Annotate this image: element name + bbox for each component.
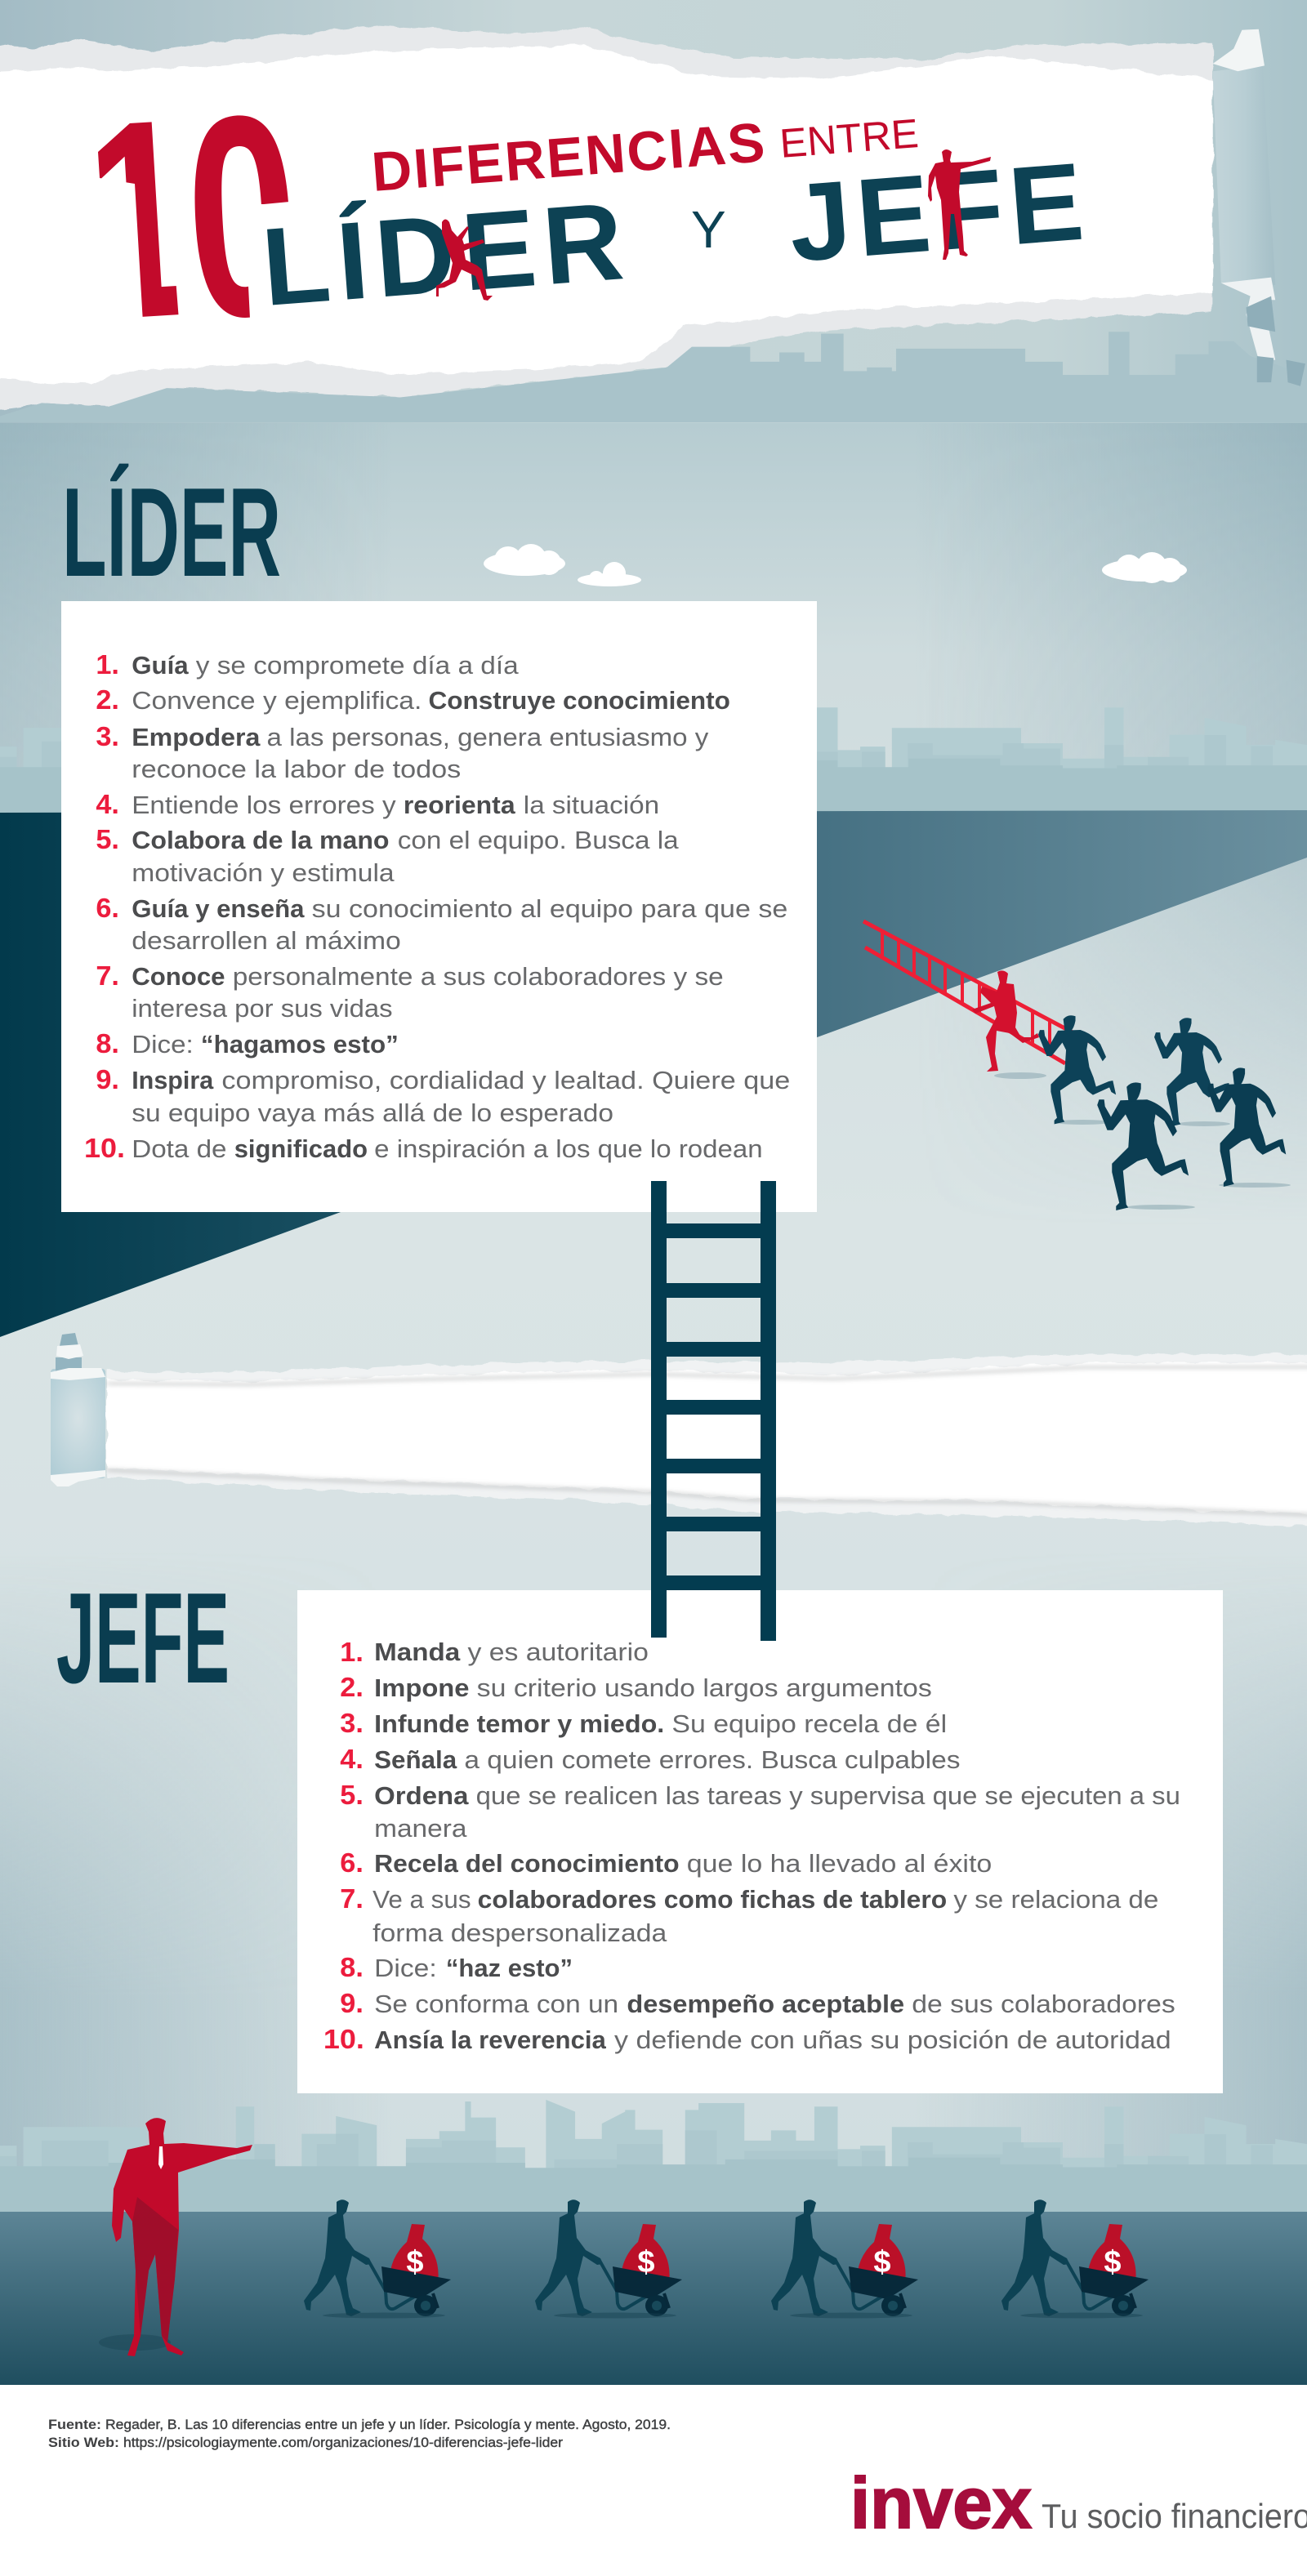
- number 10: 1: [69, 59, 206, 380]
- item 6: desarrollen al máximo: [132, 926, 401, 955]
- item 5: motivación y estimula: [132, 858, 395, 887]
- source note: https://psicologiaymente.com/organizaciones/10-diferencias-jefe-lider: [123, 2435, 563, 2450]
- item 9: desempeño aceptable: [627, 1990, 904, 2018]
- team runner 2: [1155, 1018, 1231, 1126]
- item 6: que lo ha llevado al éxito: [687, 1849, 992, 1878]
- item 7: forma despersonalizada: [372, 1919, 667, 1947]
- item 9: Se conforma con un: [374, 1990, 618, 2018]
- source note: Fuente:: [48, 2417, 101, 2432]
- team runner 3: [1098, 1083, 1188, 1210]
- item 8: [96, 1029, 399, 1059]
- item 3: 3.: [340, 1709, 364, 1739]
- item 4: Señala: [374, 1745, 457, 1774]
- item 5: 5.: [340, 1780, 364, 1811]
- item 3: a las personas, genera entusiasmo y: [267, 723, 709, 751]
- item 2: Construye conocimiento: [428, 686, 730, 715]
- team runner 4: [1208, 1068, 1285, 1186]
- header: torn paper banner: [0, 0, 1307, 423]
- item 6: 6.: [340, 1848, 364, 1879]
- item 3: reconoce la labor de todos: [132, 755, 461, 783]
- word: líder: LÍDER: [258, 179, 627, 329]
- item 6: Guía y enseña: [132, 894, 305, 923]
- item 10: [323, 2025, 1171, 2055]
- item 9: su equipo vaya más allá de lo esperado: [132, 1099, 613, 1127]
- item 10: significado: [234, 1134, 368, 1163]
- heading: líder: LÍDER: [62, 461, 281, 603]
- item 8: 8.: [96, 1029, 119, 1059]
- item 1: 1.: [96, 650, 119, 680]
- item 6: [96, 894, 787, 955]
- item 2: Impone: [374, 1674, 469, 1702]
- boss shadow: [99, 2334, 171, 2351]
- item 6: su conocimiento al equipo para que se: [312, 894, 787, 923]
- icon: red boss on jefe: [928, 149, 991, 260]
- skyline: jefe section: [0, 2100, 1307, 2212]
- wheelbarrow worker 4: $: [1104, 2245, 1122, 2280]
- item 3: Empodera: [132, 723, 261, 751]
- source note: [48, 2417, 671, 2450]
- red ladder: [863, 921, 1099, 1063]
- illustration: leader carrying red ladder with team: [863, 921, 1291, 1210]
- item 8: “haz esto”: [446, 1954, 573, 1982]
- item 3: [96, 722, 709, 783]
- item 4: a quien comete errores. Busca culpables: [464, 1745, 961, 1774]
- item 1: y se compromete día a día: [196, 651, 519, 680]
- item 4: 4.: [340, 1745, 364, 1775]
- word: diferencias: DIFERENCIAS: [369, 111, 767, 203]
- item 4: reorienta: [404, 791, 515, 819]
- boss figure: [112, 2118, 252, 2356]
- item 9: 9.: [340, 1989, 364, 2019]
- panel: líder list: [61, 601, 817, 1212]
- item 7: 7.: [340, 1884, 364, 1914]
- item 8: Dice:: [374, 1954, 437, 1982]
- item 5: 5.: [96, 825, 119, 855]
- item 9: [96, 1065, 790, 1127]
- item 1: 1.: [340, 1638, 364, 1668]
- item 2: [340, 1673, 932, 1703]
- item 1: y es autoritario: [467, 1638, 649, 1666]
- item 6: 6.: [96, 894, 119, 924]
- item 3: 3.: [96, 722, 119, 752]
- clouds: [484, 544, 1187, 586]
- item 3: [340, 1709, 947, 1739]
- item 8: Dice:: [132, 1030, 194, 1058]
- source note: Sitio Web:: [48, 2435, 119, 2450]
- item 5: Ordena: [374, 1781, 469, 1810]
- word: jefe: JEFE: [785, 140, 1087, 285]
- wheelbarrow worker 3: $: [873, 2245, 891, 2280]
- item 8: [340, 1953, 573, 1983]
- wheelbarrow worker 1: [304, 2199, 451, 2318]
- cloud 1: [484, 544, 565, 576]
- item 10: 10.: [84, 1134, 125, 1164]
- paper roll: [51, 1333, 105, 1486]
- item 1: Guía: [132, 651, 189, 680]
- cloud 2: [578, 562, 641, 586]
- boss tie: [158, 2146, 163, 2169]
- skyline: líder section: [0, 701, 1307, 813]
- item 2: 2.: [340, 1673, 364, 1703]
- item 7: 7.: [96, 961, 119, 992]
- item 5: con el equipo. Busca la: [398, 826, 679, 854]
- item 5: [340, 1780, 1180, 1843]
- item 7: [96, 961, 724, 1023]
- number 10: [98, 115, 288, 318]
- illustration: boss pointing: [99, 2118, 252, 2356]
- torn paper strip: [51, 1333, 1307, 1527]
- wheelbarrow worker 3: [771, 2199, 918, 2318]
- title: 10 diferencias entre líder y jefe: [98, 115, 1082, 318]
- item 7: colaboradores como fichas de tablero: [478, 1885, 947, 1914]
- invex wordmark: invex: [850, 2462, 1032, 2543]
- wheelbarrow worker 2: $: [637, 2245, 655, 2280]
- item 7: y se relaciona de: [953, 1885, 1158, 1914]
- word: y: Y: [691, 200, 726, 259]
- item 8: “hagamos esto”: [201, 1030, 399, 1058]
- wheelbarrow worker 4: [1001, 2199, 1149, 2318]
- item 3: Infunde temor y miedo.: [374, 1709, 664, 1738]
- item 10: e inspiración a los que lo rodean: [374, 1134, 763, 1163]
- wheelbarrow worker 1: $: [406, 2245, 424, 2280]
- item 9: 9.: [96, 1065, 119, 1095]
- item 5: Colabora de la mano: [132, 826, 390, 854]
- item 7: personalmente a sus colaboradores y se: [233, 962, 724, 991]
- team runner 1: [1039, 1016, 1115, 1124]
- item 9: Inspira: [132, 1066, 214, 1094]
- ground band: [0, 2212, 1307, 2385]
- cloud 3: [1102, 552, 1187, 583]
- red leader: [972, 970, 1039, 1072]
- item 5: que se realicen las tareas y supervisa que se ejecuten a su: [476, 1781, 1180, 1810]
- item 2: su criterio usando largos argumentos: [477, 1674, 932, 1702]
- wheelbarrow worker 2: [535, 2199, 682, 2318]
- item 9: compromiso, cordialidad y lealtad. Quiere que: [221, 1066, 790, 1094]
- item 1: Manda: [374, 1638, 461, 1666]
- background: sky of both sections: [0, 423, 1307, 2212]
- item 4: [96, 790, 659, 820]
- word: entre: ENTRE: [778, 110, 920, 167]
- item 7: [340, 1884, 1158, 1947]
- source note: Regader, B. Las 10 diferencias entre un jefe y un líder. Psicología y mente. Agosto, 2019.: [105, 2417, 671, 2432]
- item 1: [340, 1638, 649, 1668]
- item 4: la situación: [524, 791, 659, 819]
- number 10: 0: [179, 54, 306, 378]
- item 10: 10.: [323, 2025, 364, 2055]
- item 9: de sus colaboradores: [912, 1990, 1175, 2018]
- item 5: [96, 825, 679, 887]
- item 10: Dota de: [132, 1134, 227, 1163]
- item 7: Ve a sus: [372, 1885, 471, 1914]
- item 6: [340, 1848, 992, 1879]
- item 2: Convence y ejemplifica.: [132, 686, 422, 715]
- item 10: Ansía la reverencia: [374, 2026, 606, 2054]
- item 4: 4.: [96, 790, 119, 820]
- item 1: [96, 650, 519, 680]
- item 7: interesa por sus vidas: [132, 994, 393, 1023]
- item 6: Recela del conocimiento: [374, 1849, 680, 1878]
- item 3: Su equipo recela de él: [671, 1709, 947, 1738]
- item 10: [84, 1134, 763, 1164]
- item 8: 8.: [340, 1953, 364, 1983]
- item 9: [340, 1989, 1175, 2019]
- panel: jefe list: [297, 1590, 1223, 2093]
- item 4: Entiende los errores y: [132, 791, 396, 819]
- icon: red runner on líder: [436, 219, 493, 301]
- item 7: Conoce: [132, 962, 225, 991]
- logo: invex: [850, 2462, 1307, 2543]
- item 5: manera: [374, 1814, 467, 1843]
- item 2: [96, 685, 730, 715]
- icon: dark ladder: [651, 1181, 776, 1641]
- shadows: [994, 1072, 1291, 1210]
- item 2: 2.: [96, 685, 119, 715]
- heading: jefe: JEFE: [56, 1567, 230, 1710]
- item 10: y defiende con uñas su posición de autoridad: [614, 2026, 1171, 2054]
- diagonal dark band: [0, 810, 1307, 1337]
